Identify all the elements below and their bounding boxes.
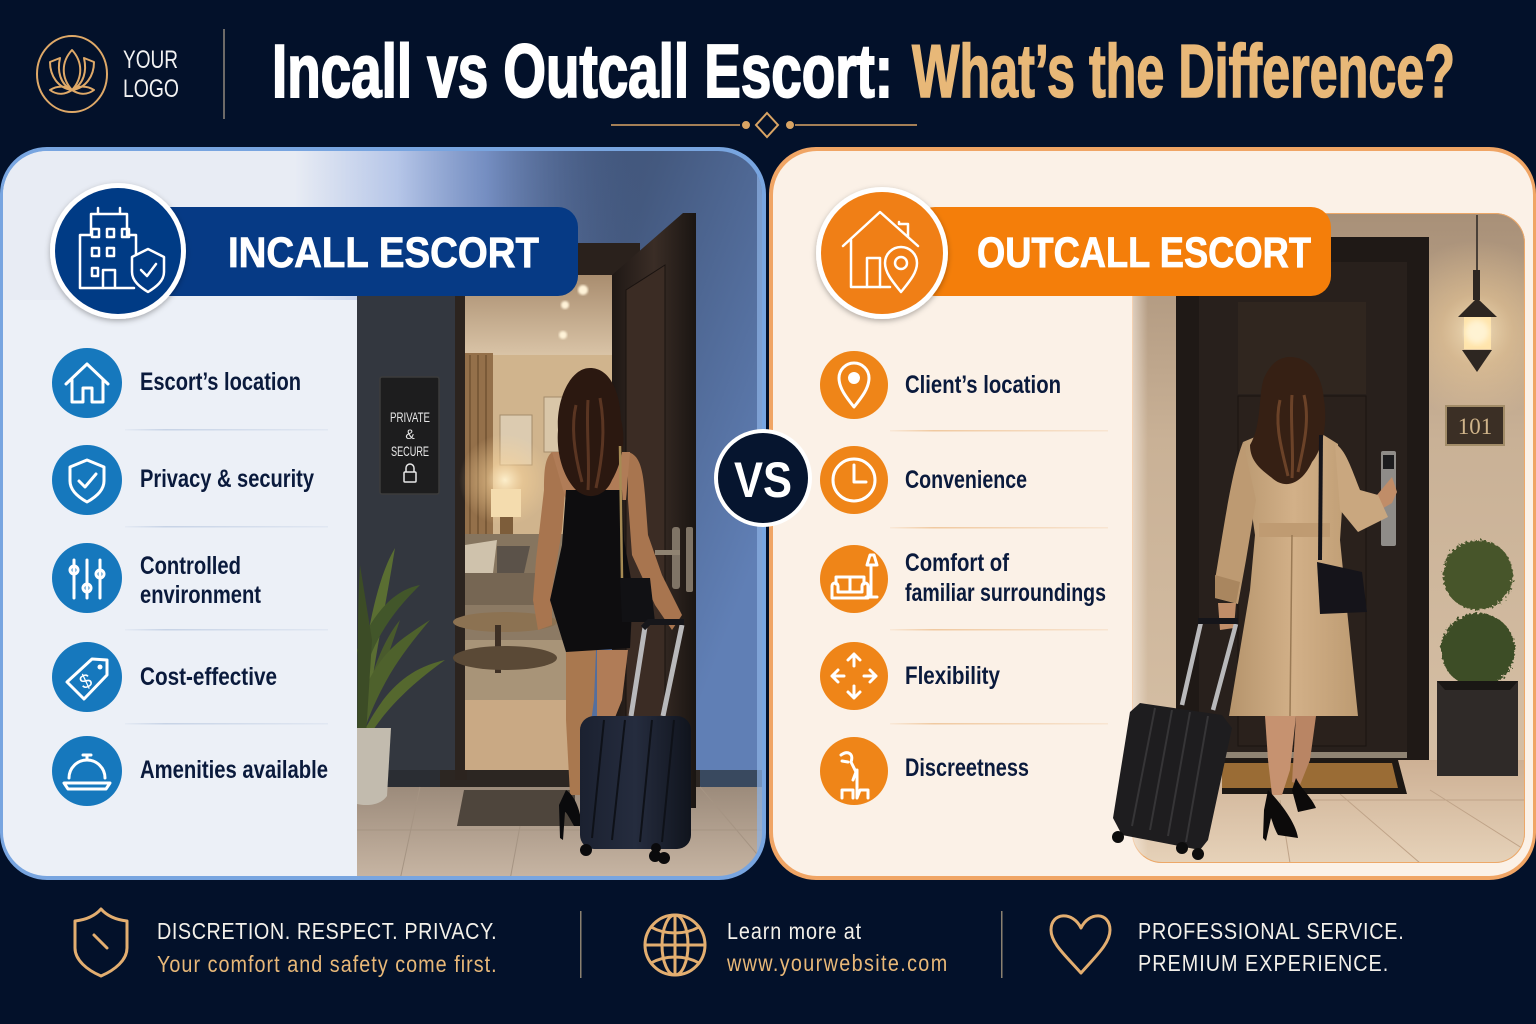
item: controlled environment: Controlled [140,552,241,580]
icon: house with pin [816,187,948,319]
woman in trench coat [1215,357,1397,841]
incall banner: INCALL ESCORT [228,229,539,277]
item: controlled environment: environment [140,581,262,609]
title ornament [611,113,917,137]
sign: private and secure: PRIVATE [390,409,430,425]
door lock [1381,451,1396,546]
outcall banner [816,187,1331,319]
plaque: room number: 101 [1458,414,1492,439]
logo text: YOUR [123,46,178,74]
panel: outcall [769,147,1536,880]
item: discreetness [820,737,1029,805]
topiary [1437,540,1518,776]
item: flexibility [820,642,1000,710]
sign: private and secure: & [405,426,415,442]
sign: private and secure [380,377,439,494]
footer [75,909,1404,978]
plant [357,548,445,805]
footer item: discretion [75,909,497,977]
item: amenities available: Amenities available [140,756,328,784]
footer item: professional service [1051,916,1404,976]
outcall list [820,351,1108,805]
item: comfort of familiar surroundings: familiar surroundings [905,579,1106,607]
door [612,213,696,808]
item: privacy and security: Privacy & security [140,465,314,493]
room interior [453,275,615,770]
incall list [52,348,328,806]
title: Incall vs Outcall Escort: [272,29,893,113]
item: privacy and security [52,445,314,515]
footer item: website: www.yourwebsite.com [726,951,947,976]
item: client's location [820,351,1061,419]
footer item: discretion: Your comfort and safety come first. [157,952,497,977]
item: convenience [820,446,1027,514]
item: discreetness: Discreetness [905,754,1029,782]
item: escort's location [52,348,301,418]
item: cost-effective [52,642,277,712]
woman [533,368,682,840]
lantern [1458,215,1497,372]
plaque: room number [1446,406,1504,445]
footer item: professional service: PREMIUM EXPERIENCE. [1138,951,1388,976]
panel: incall [0,147,766,880]
logo text: LOGO [123,75,179,103]
illustration: woman entering room [0,150,765,880]
vs badge [714,429,812,527]
footer item: professional service: PROFESSIONAL SERVICE. [1138,919,1404,944]
icon: building with shield [50,183,186,319]
item: cost-effective: $ [76,670,96,694]
item: comfort of familiar surroundings [820,545,1106,613]
footer item: website: Learn more at [727,919,861,944]
doormat [1222,760,1407,794]
footer item: discretion: DISCRETION. RESPECT. PRIVACY. [157,919,497,944]
item: flexibility: Flexibility [905,662,1000,690]
footer item: website [645,915,947,976]
doormat [457,790,575,826]
sign: private and secure: SECURE [391,443,429,459]
item: controlled environment [52,543,262,613]
logo text [123,46,179,103]
icon: lotus in ring [37,36,107,112]
suitcase [580,622,691,864]
logo [37,36,179,112]
door frame [1176,237,1429,760]
illustration: woman at door [1132,213,1536,863]
suitcase [1112,621,1238,860]
incall banner [50,183,578,319]
item: amenities available [52,736,328,806]
vs badge: VS [734,452,792,508]
item: cost-effective: Cost-effective [140,663,277,691]
item: comfort of familiar surroundings: Comfort of [905,549,1010,577]
item: client's location: Client’s location [905,371,1061,399]
item: escort's location: Escort’s location [140,368,301,396]
outcall banner: OUTCALL ESCORT [977,229,1311,277]
item: convenience: Convenience [905,466,1027,494]
